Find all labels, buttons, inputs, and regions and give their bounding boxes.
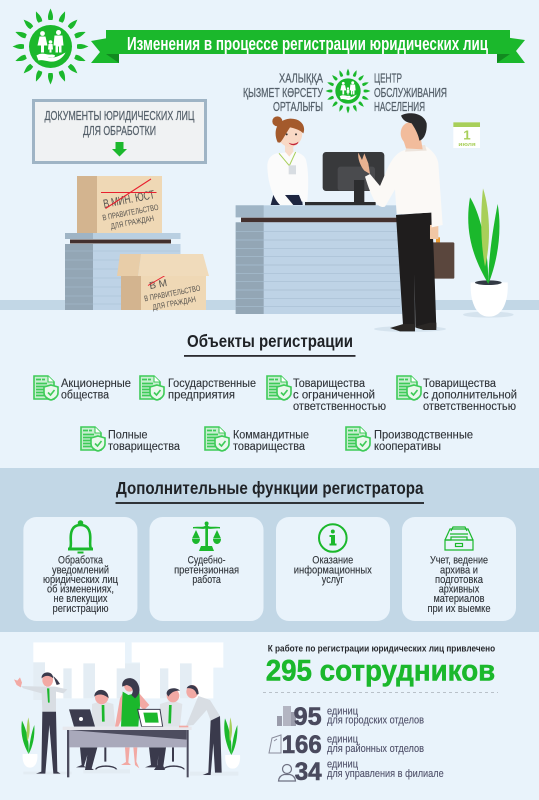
item: limited partnerships <box>205 427 309 453</box>
person: laptop user <box>69 690 117 770</box>
card: notifications: регистрацию <box>52 603 108 615</box>
card: information services <box>276 517 390 621</box>
card: archive <box>402 517 516 621</box>
floor shadows <box>23 769 238 776</box>
item: limited liability: ответственностью <box>293 401 386 413</box>
monitor <box>305 152 384 205</box>
box: lower: В М <box>149 278 168 292</box>
kazakh caption: ХАЛЫҚҚА <box>279 70 323 86</box>
documents sign: ДЛЯ ОБРАБОТКИ <box>83 123 156 138</box>
plant: left <box>21 717 37 768</box>
card: notifications: об изменениях, <box>47 584 114 596</box>
illustration: team at table <box>14 642 240 777</box>
box: upper <box>77 176 162 233</box>
item: cooperatives <box>346 427 473 453</box>
card: archive: подготовка <box>435 574 483 586</box>
box: lower: В ПРАВИТЕЛЬСТВО <box>143 284 201 303</box>
floor strip <box>0 300 539 310</box>
card: information services: информационных <box>294 564 372 576</box>
card: archive: материалов <box>434 593 485 605</box>
item: limited liability: Товарищества <box>293 378 366 390</box>
item: general partnerships: Полные <box>108 430 148 442</box>
item: cooperatives: кооперативы <box>374 441 441 453</box>
russian caption: НАСЕЛЕНИЯ <box>374 99 425 114</box>
stat: branch management: для управления в филиале <box>327 768 444 780</box>
item: state enterprises <box>140 376 256 402</box>
main logo <box>12 8 89 84</box>
box: lower: ДЛЯ ГРАЖДАН <box>152 295 197 312</box>
icon: person <box>278 764 296 781</box>
kazakh caption: ОРТАЛЫҒЫ <box>273 99 323 114</box>
icon: map <box>269 735 281 753</box>
visitor <box>358 113 443 331</box>
card: archive: при их выемке <box>428 603 490 615</box>
card: information services: услуг <box>322 574 344 586</box>
box: lower <box>117 254 209 313</box>
illustration: reception desk, clerk and visitor <box>236 113 514 332</box>
service center logo with captions <box>243 69 447 114</box>
stat: district departments <box>269 731 424 759</box>
item: additional liability: ответственностью <box>423 401 516 413</box>
stat: city departments: единиц <box>327 705 359 717</box>
box: upper: В ПРАВИТЕЛЬСТВО <box>102 203 159 222</box>
band: registrar functions background <box>0 468 539 632</box>
card: litigation: Судебно- <box>188 555 226 567</box>
card: archive: архива и <box>440 564 478 576</box>
box: upper: В МИН. ЮСТ <box>102 187 156 211</box>
stat: branch management <box>278 758 444 786</box>
item: additional liability <box>397 376 517 413</box>
icon: archive tray <box>445 527 473 550</box>
registration objects list <box>34 376 517 453</box>
documents sign: ДОКУМЕНТЫ ЮРИДИЧЕСКИХ ЛИЦ <box>44 108 195 123</box>
calendar: 1 <box>463 127 471 142</box>
card: notifications: Обработка <box>58 555 103 567</box>
title ribbon <box>91 30 525 63</box>
russian caption: ЦЕНТР <box>374 70 402 86</box>
card: notifications: не влекущих <box>54 593 108 605</box>
item: limited liability: с ограниченной <box>293 390 375 402</box>
kazakh caption <box>243 70 323 114</box>
staff intro line: К работе по регистрации юридических лиц привлечено <box>268 644 495 655</box>
card: information services: Оказание <box>312 555 353 567</box>
card: litigation <box>150 517 264 621</box>
item: cooperatives: Производственные <box>374 430 473 442</box>
skyline backdrop <box>33 642 223 700</box>
item: limited partnerships: Коммандитные <box>233 430 309 442</box>
calendar: июля <box>458 142 476 148</box>
item: joint-stock companies <box>34 376 131 402</box>
item: limited liability <box>267 376 386 413</box>
briefcase <box>428 237 454 279</box>
desk <box>63 727 192 777</box>
russian caption <box>374 70 447 114</box>
documents sign <box>34 100 206 162</box>
item: joint-stock companies: общества <box>61 390 110 402</box>
calendar <box>453 122 480 148</box>
shadow <box>374 326 446 332</box>
staff total: 295 сотрудников <box>266 655 495 688</box>
stat: branch management: единиц <box>327 759 359 771</box>
icon: scales <box>192 522 221 551</box>
person: leaning <box>179 685 222 775</box>
icon: info <box>319 524 347 552</box>
item: state enterprises: предприятия <box>168 390 235 402</box>
item: joint-stock companies: Акционерные <box>61 378 131 390</box>
person: woman <box>115 678 149 768</box>
card: archive: архивных <box>439 584 480 596</box>
plant: right <box>224 717 240 769</box>
section heading: additional functions: Дополнительные функции регистратора <box>116 478 424 498</box>
card: archive: Учет, ведение <box>430 555 488 567</box>
card: notifications: юридических лиц <box>43 574 118 586</box>
kazakh caption: ҚЫЗМЕТ КӨРСЕТУ <box>243 85 323 100</box>
stat: city departments <box>277 703 424 731</box>
item: additional liability: Товарищества <box>423 378 497 390</box>
clerk <box>267 116 308 205</box>
item: general partnerships <box>81 427 181 453</box>
stacked desk with boxes <box>65 176 209 313</box>
stat: city departments: для городских отделов <box>327 714 424 726</box>
stat: district departments: для районных отделов <box>327 743 424 755</box>
plant <box>463 188 514 318</box>
item: additional liability: с дополнительной <box>423 390 517 402</box>
card: notifications <box>23 517 137 621</box>
box: upper: ДЛЯ ГРАЖДАН <box>110 214 155 231</box>
card: litigation: работа <box>192 574 221 586</box>
stat: district departments: 166 <box>282 731 322 759</box>
stat: city departments: 95 <box>294 703 322 731</box>
desk <box>236 205 402 314</box>
russian caption: ОБСЛУЖИВАНИЯ <box>374 85 447 100</box>
item: general partnerships: товарищества <box>108 441 181 453</box>
section heading: registration objects: Объекты регистрации <box>187 331 353 351</box>
card: notifications: уведомлений <box>52 564 109 576</box>
stat: branch management: 34 <box>295 758 322 786</box>
icon: buildings <box>277 706 296 726</box>
icon: bell <box>68 522 93 552</box>
stat: district departments: единиц <box>327 734 359 746</box>
item: state enterprises: Государственные <box>168 378 256 390</box>
icon: down arrow <box>112 142 127 156</box>
card: litigation: претензионная <box>174 564 239 576</box>
person: on phone <box>14 672 67 774</box>
item: limited partnerships: товарищества <box>233 441 306 453</box>
person: tablet user <box>138 688 185 770</box>
